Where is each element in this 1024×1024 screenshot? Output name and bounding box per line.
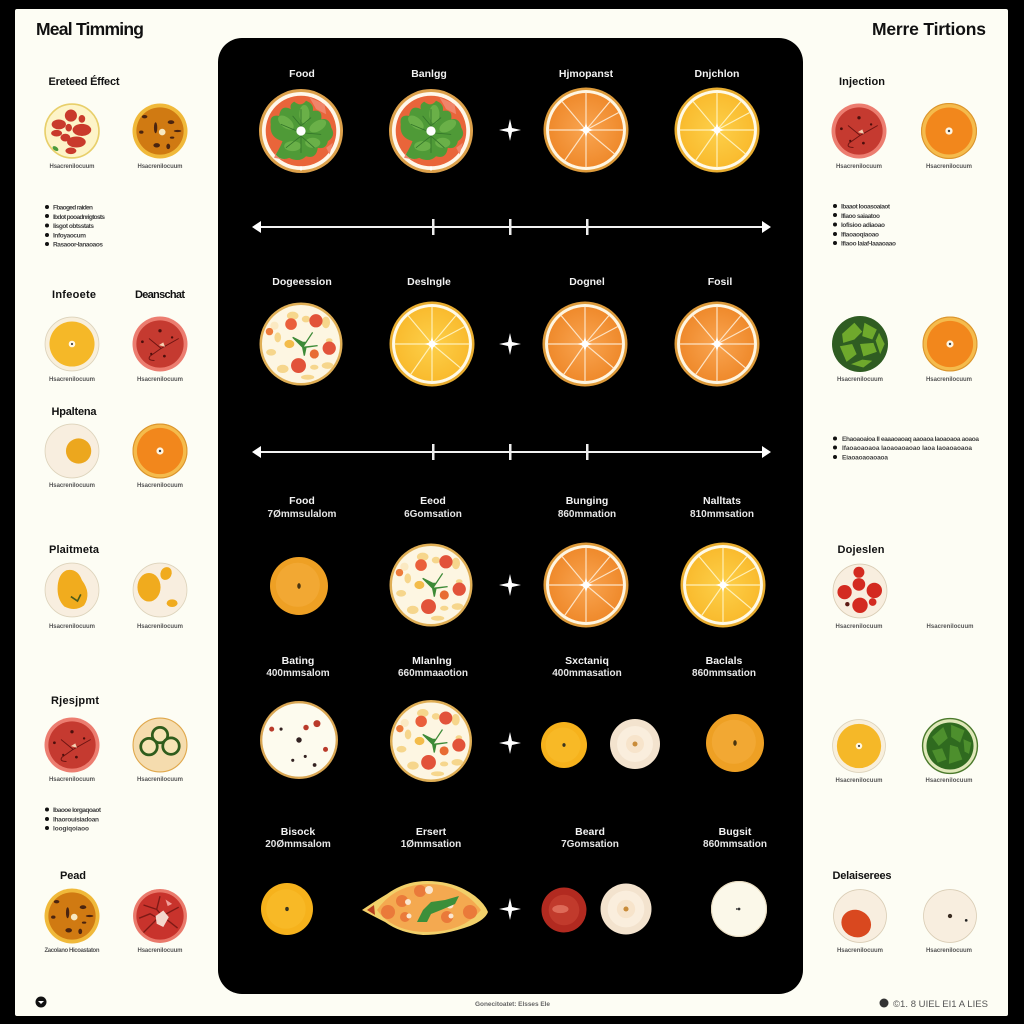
plus sign <box>499 333 521 355</box>
plus sign <box>499 732 521 754</box>
icon: egg <box>45 424 99 478</box>
bullet list: Iisgot obtsstats <box>53 223 94 230</box>
caption: Hsacrenilocuum <box>50 164 94 170</box>
section heading: Plaitmeta: Plaitmeta <box>49 544 100 556</box>
footer: source note: Gonecitoatet: Elsses Ele <box>475 1001 550 1008</box>
row 2 labels <box>272 276 732 288</box>
footer: credits: ©1. 8 UIEL EI1 A LIES <box>893 999 988 1010</box>
caption: Hsacrenilocuum <box>926 778 972 784</box>
timeline arrow <box>252 219 771 235</box>
icon: curry plate <box>44 888 100 944</box>
caption: Hsacrenilocuum <box>137 777 183 783</box>
row 1 labels: Dnjchlon <box>695 68 739 80</box>
food: orange slice <box>544 88 628 172</box>
plus sign <box>499 898 521 920</box>
food: white circle <box>711 881 767 937</box>
bullet list: Rasaoor-Ianaoaos <box>53 242 103 248</box>
icon: footer badge <box>36 996 46 1008</box>
caption: Hsacrenilocuum <box>49 777 95 783</box>
caption: Hsacrenilocuum <box>926 948 972 954</box>
food: yellow ball <box>541 722 587 768</box>
row 5 labels: 7Gomsation <box>561 839 619 850</box>
caption: Hsacrenilocuum <box>836 778 882 784</box>
icon: greens <box>923 719 977 773</box>
row 3 labels: Food <box>289 495 315 507</box>
plus sign <box>499 119 521 141</box>
footer: badge icon <box>880 998 888 1008</box>
section heading: Pead: Pead <box>60 870 86 882</box>
row 2 labels: Fosil <box>708 276 732 288</box>
bullet list: Infoyaocum <box>53 232 86 240</box>
food: lemon slice <box>674 88 760 172</box>
food: orange slice <box>674 302 760 386</box>
caption: Hsacrenilocuum <box>837 377 883 383</box>
row 3 labels: 7Ømmsulalom <box>268 509 337 520</box>
bullet list: Fbaoged raiden <box>53 204 93 212</box>
caption: Hsacrenilocuum <box>836 624 882 630</box>
bullet list: Ibaaot Iooasoaiaot <box>841 204 891 210</box>
row 5 labels: Ersert <box>416 826 447 838</box>
icon: tomato <box>834 890 886 942</box>
row 5 labels: Beard <box>575 826 605 838</box>
icon: red fruit <box>832 104 886 158</box>
row 4 labels: 860mmsation <box>692 668 756 679</box>
row 4 labels: Mlanlng <box>412 655 452 667</box>
row 2 labels: Deslngle <box>407 276 451 288</box>
icon: orange <box>921 103 977 159</box>
food: cream circle <box>610 719 660 769</box>
bullet list <box>45 204 105 248</box>
row 5 labels: Bisock <box>281 826 315 838</box>
icon: curry plate <box>132 104 188 158</box>
row 1 labels: Hjmopanst <box>559 68 614 80</box>
row 4 labels: 660mmaaotion <box>398 668 468 679</box>
bullet list: Ibdot pooadnrigtosts <box>53 214 105 221</box>
bullet list <box>45 807 102 832</box>
row 4 labels: 400mmsalom <box>266 668 330 679</box>
icon: green rings <box>133 718 187 772</box>
row 3 labels: Eeod <box>420 495 446 507</box>
bullet list: Ifiaoo Iaiaf-Iaaaoaao <box>841 240 896 248</box>
row 3 labels: 810mmsation <box>690 509 754 520</box>
food: salad <box>389 89 473 173</box>
row 5 labels: Bugsit <box>719 826 752 838</box>
food: orange slice <box>542 302 628 386</box>
icon: yellow citrus <box>45 317 99 371</box>
bullet list <box>833 204 896 248</box>
food: red ball <box>542 888 586 932</box>
section heading: Injection: Injection <box>839 76 885 88</box>
row 3 labels: 6Gomsation <box>404 509 462 520</box>
caption: Hsacrenilocuum <box>138 948 182 954</box>
icon: red berries <box>833 564 887 618</box>
panel: left column <box>36 75 188 1008</box>
bullet list: Ibaooe Iorgaqoaot <box>53 807 102 814</box>
icon: red chopped fruit <box>133 889 187 943</box>
section heading: Dojeslen: Dojeslen <box>838 544 885 556</box>
food: lemon slice <box>680 542 766 628</box>
section heading: Rjesjpmt: Rjesjpmt <box>51 695 99 707</box>
row 1 labels: Food <box>289 68 315 80</box>
section heading: Infeoete: Infeoete <box>52 289 96 301</box>
food: white plate <box>260 701 338 779</box>
row 1 labels <box>289 68 739 80</box>
row 4 labels: Baclals <box>706 655 743 667</box>
icon: orange <box>132 424 188 478</box>
row 5 labels: 860mmsation <box>703 839 767 850</box>
icon: red fruit <box>44 718 100 772</box>
bullet list: Ifiaoaoqiaoao <box>841 232 879 238</box>
bullet list: Ihaorouisiadoan <box>53 816 99 824</box>
row 3 labels: Nalltats <box>703 495 741 507</box>
bullet list <box>833 436 979 462</box>
caption: Hsacrenilocuum <box>137 483 183 489</box>
food: salad <box>259 89 343 173</box>
bullet list: Ehaoaoaioa II eaaaoaoaq aaoaoa Iaoaoaoa aoaoa <box>842 436 979 443</box>
section heading: Hpaltena: Hpaltena <box>52 406 97 418</box>
row 3 labels: Bunging <box>566 495 608 507</box>
food: pizza <box>390 544 472 626</box>
icon: cream dots <box>924 890 976 942</box>
icon: red chunks on plate <box>45 104 99 158</box>
food: cream circle <box>600 884 652 934</box>
food: pizza <box>260 302 342 386</box>
bullet list: Eiaoaoaoaoaoa <box>842 454 888 462</box>
title: left heading: Meal Timming <box>36 19 144 39</box>
row 2 labels: Dogeession <box>272 276 332 288</box>
icon: yellow citrus <box>833 720 885 772</box>
row 4 labels: Bating <box>282 655 314 667</box>
bullet list: Iofisioo adiaoao <box>841 222 885 229</box>
panel: right column <box>832 76 979 954</box>
section heading: Delaiserees: Delaiserees <box>832 870 892 882</box>
caption: Hsacrenilocuum <box>926 377 972 383</box>
section heading: Ereteed Effect: Ereteed Éffect <box>48 75 120 88</box>
caption: Hsacrenilocuum <box>926 164 972 170</box>
section heading: Deanschat: Deanschat <box>135 289 185 301</box>
bullet list: Ifaoaoaoaoa Iaoaoaoaoao Iaoa Iaoaoaoaoa <box>842 445 972 452</box>
row 4 labels: Sxctaniq <box>565 655 609 667</box>
row 5 labels <box>265 826 767 850</box>
bullet list: Ifiaoo saiaatoo <box>841 213 880 220</box>
caption: Hsacrenilocuum <box>137 624 183 630</box>
caption: Hsacrenilocuum <box>837 948 883 954</box>
caption: Hsacrenilocuum <box>138 164 182 170</box>
row 4 labels: 400mmasation <box>552 668 622 679</box>
food: orange ball <box>706 714 764 772</box>
food: yellow ball <box>261 883 313 935</box>
row 5 labels: 20Ømmsalom <box>265 839 331 850</box>
row 5 labels: 1Ømmsation <box>401 839 461 850</box>
caption: Hsacrenilocuum <box>836 164 882 170</box>
food: orange ball <box>270 557 328 615</box>
food: lemon slice <box>390 302 474 386</box>
row 3 labels <box>268 495 754 520</box>
caption: Hsacrenilocuum <box>49 483 95 489</box>
caption: Zacolano Hicoastaton <box>44 948 100 954</box>
row 1 labels: Banlgg <box>411 68 447 80</box>
icon: greens <box>832 316 888 372</box>
icon: red fruit <box>132 316 188 372</box>
caption: Hsacrenilocuum <box>49 377 95 383</box>
food: oval dish <box>362 881 488 935</box>
icon: mango <box>45 563 99 617</box>
caption: Hsacrenilocuum <box>49 624 95 630</box>
bullet list: Ioogiqoiaoo <box>53 826 89 832</box>
caption: Hsacrenilocuum <box>137 377 183 383</box>
icon: orange <box>922 316 978 372</box>
row 4 labels <box>266 655 756 679</box>
icon: yellow blobs <box>133 563 187 617</box>
timeline arrow <box>252 444 771 460</box>
food: orange slice <box>544 542 628 628</box>
row 3 labels: 860mmation <box>558 509 616 520</box>
plus sign <box>499 574 521 596</box>
caption: Hsacrenilocuum <box>926 624 974 630</box>
food: pizza <box>390 700 472 782</box>
row 2 labels: Dognel <box>569 276 605 288</box>
title: right heading: Merre Tirtions <box>872 19 986 39</box>
panel: center dark board <box>218 38 803 994</box>
